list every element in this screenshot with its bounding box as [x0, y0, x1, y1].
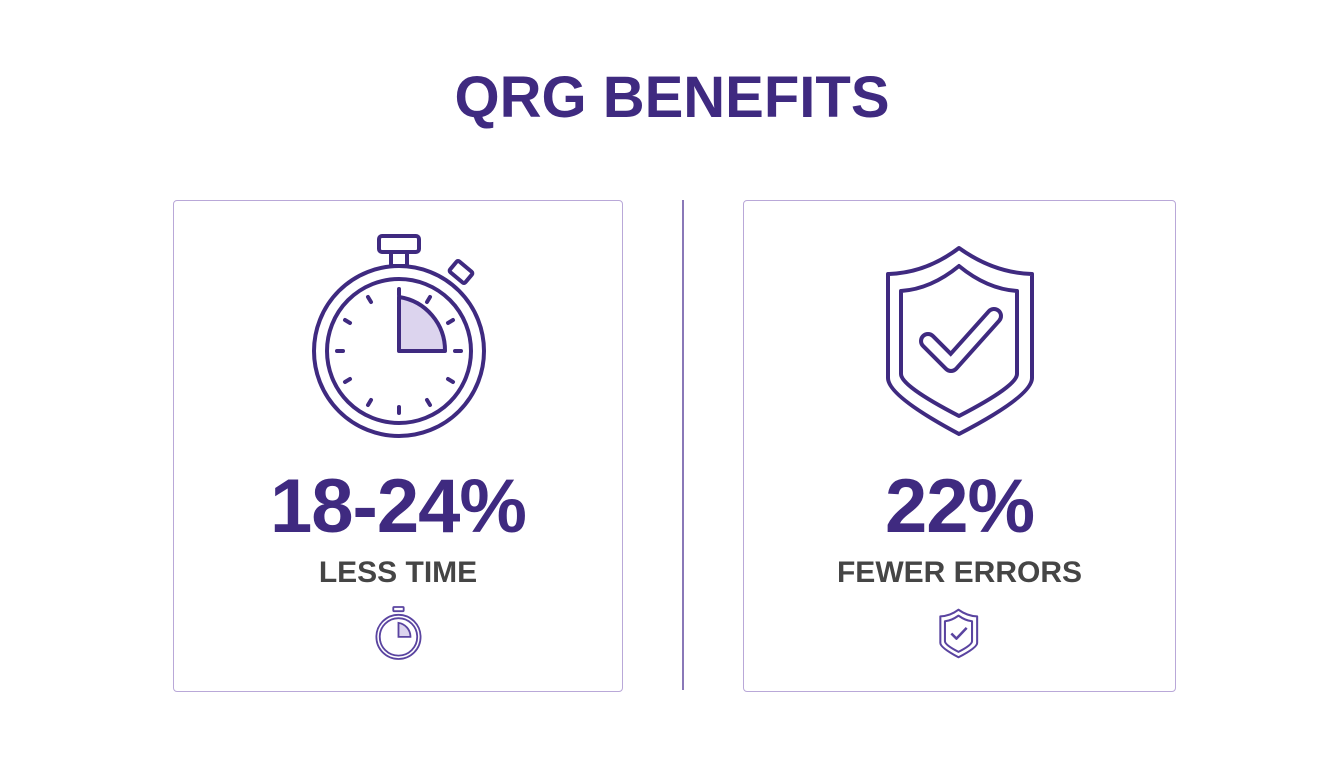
panel: less time: [173, 200, 623, 692]
label: LESS TIME: [319, 556, 477, 589]
icon: small stopwatch: [375, 606, 422, 660]
label: FEWER ERRORS: [837, 556, 1082, 589]
icon: small shield: [939, 608, 978, 658]
number: 22%: [885, 464, 1034, 549]
panel: fewer errors: [743, 200, 1176, 692]
title: QRG BENEFITS: [454, 65, 890, 130]
divider: [682, 200, 684, 690]
number: 18-24%: [270, 464, 526, 549]
icon: stopwatch: [312, 234, 486, 438]
icon: shield: [886, 246, 1034, 436]
